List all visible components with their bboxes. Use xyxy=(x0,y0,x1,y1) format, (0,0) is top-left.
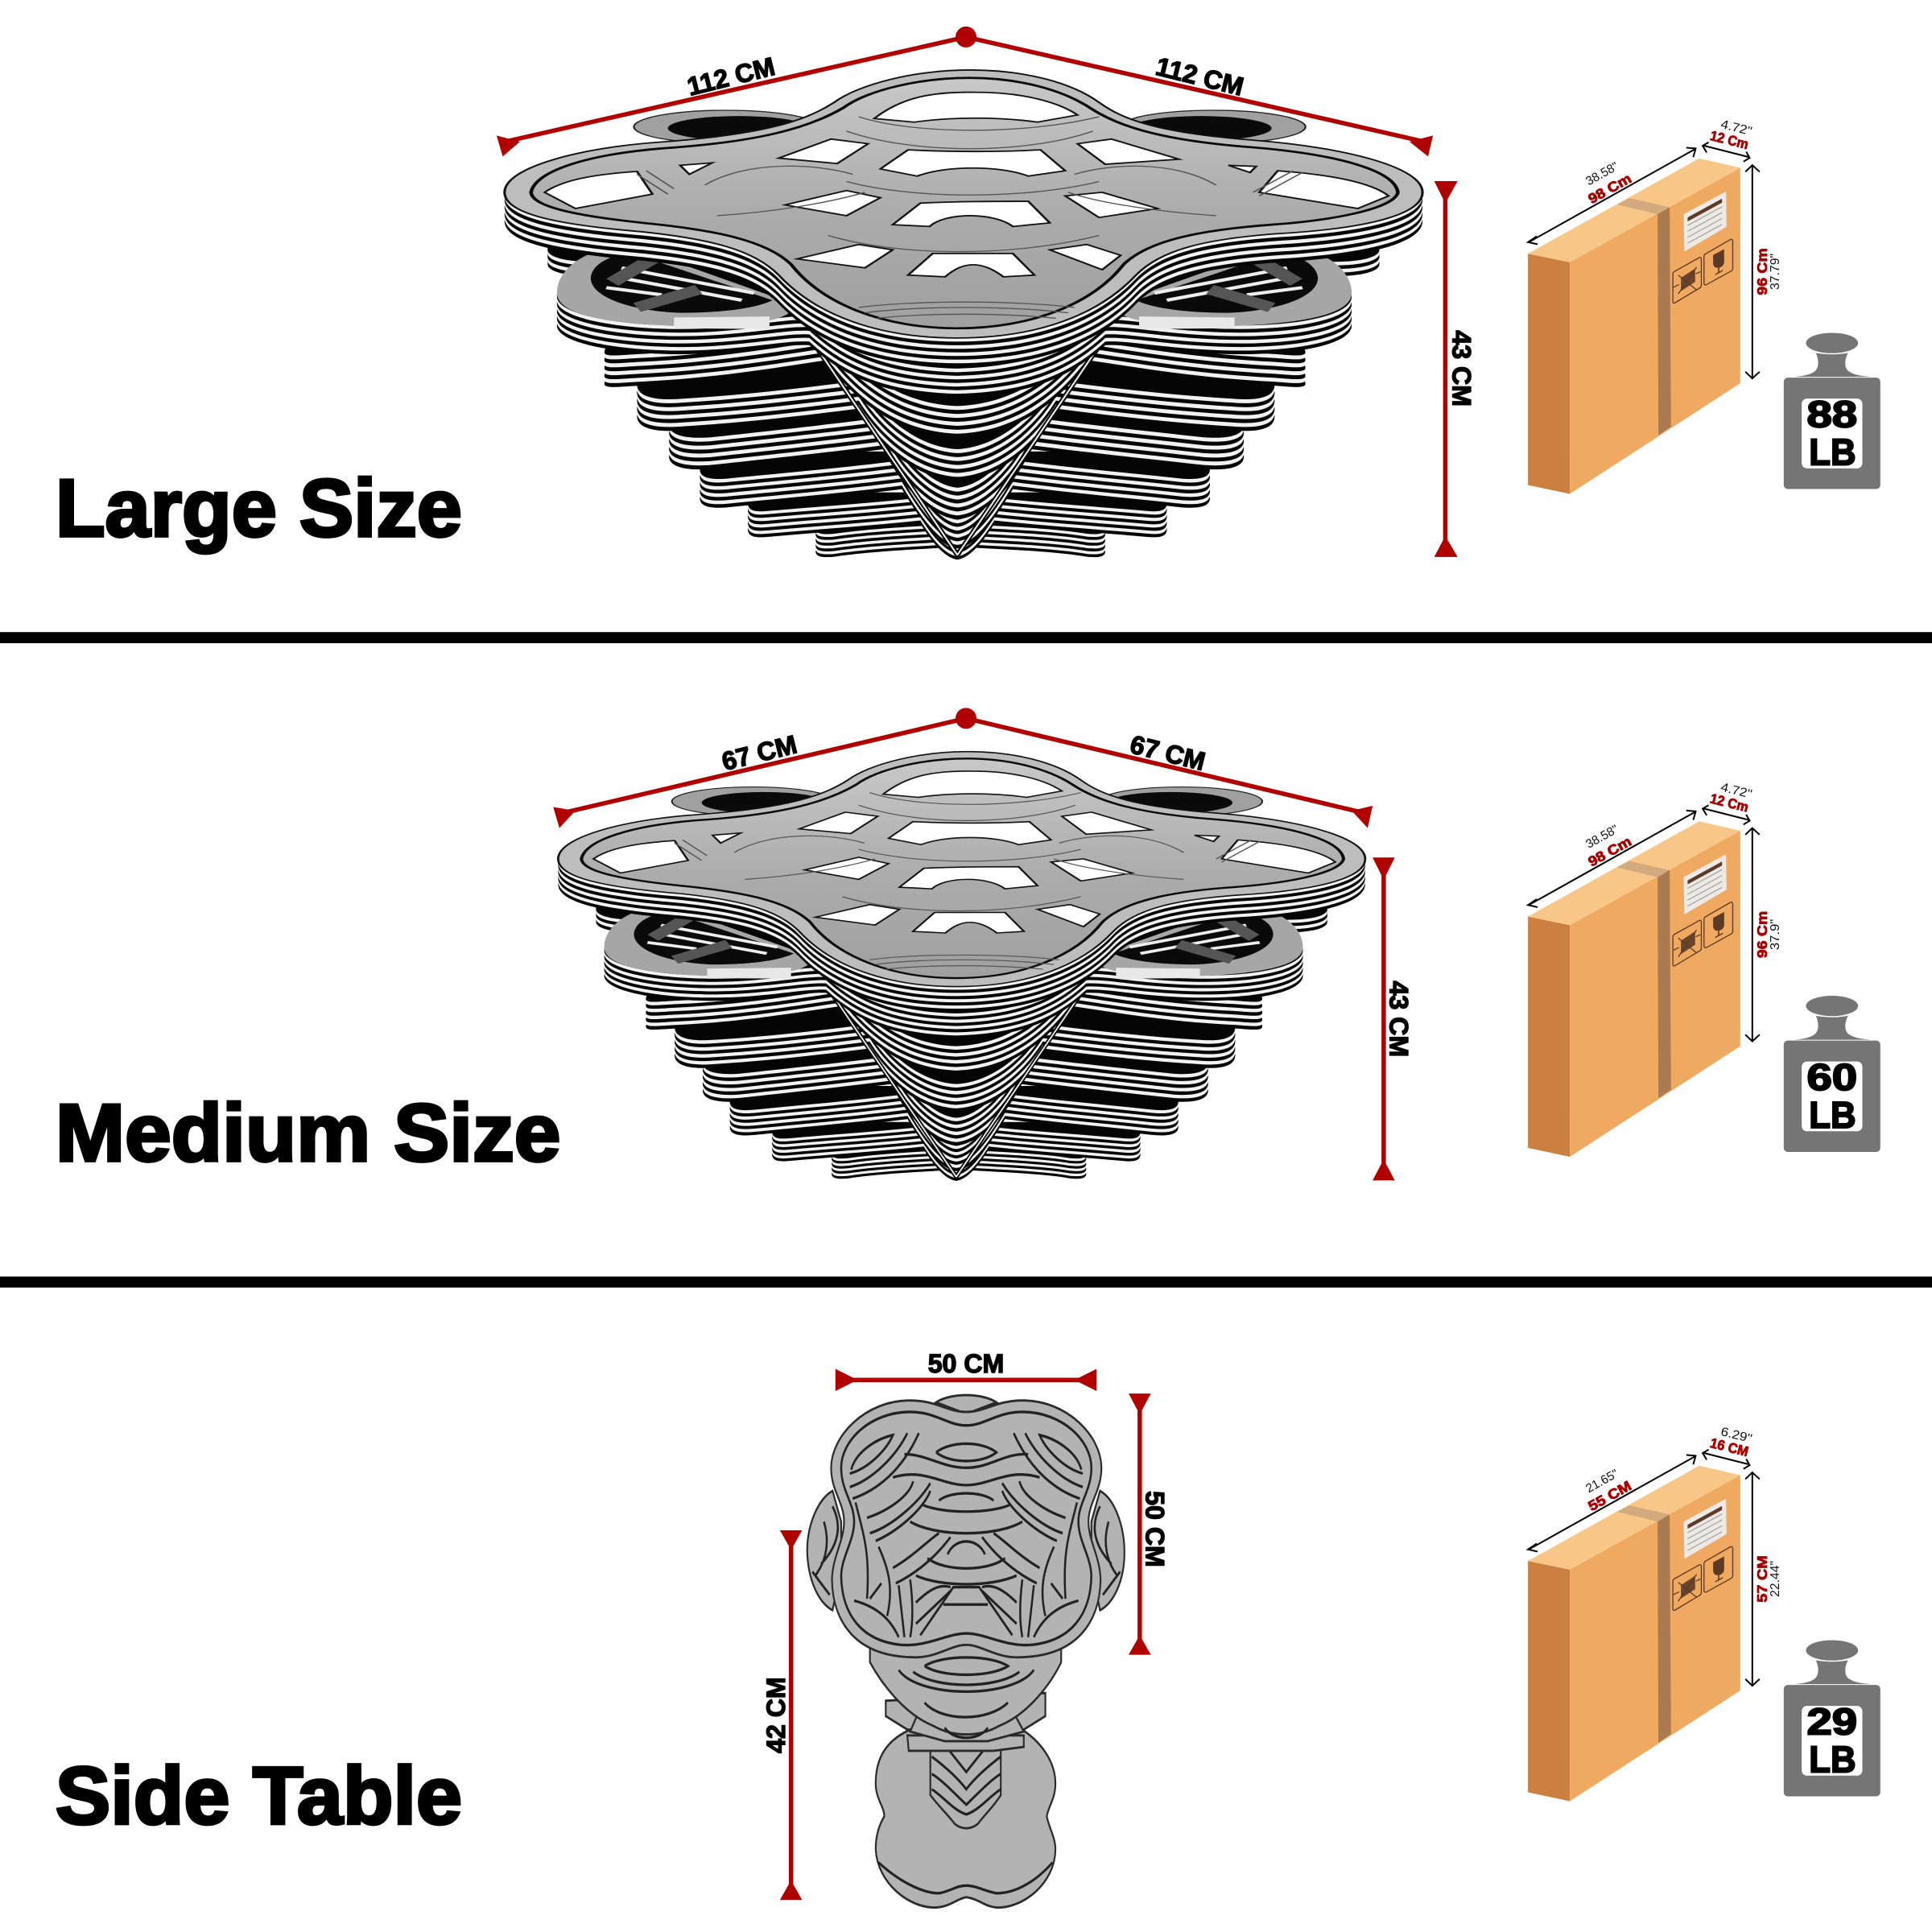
heading: Side Table: Side Table xyxy=(56,1751,462,1841)
weight badge: 60 LB: 60 xyxy=(1806,1056,1857,1098)
dimension: width and depth lines xyxy=(497,27,1433,156)
heading: Medium Size: Medium Size xyxy=(56,1088,560,1179)
shipping box: large xyxy=(1528,118,1782,493)
shipping box: side table xyxy=(1528,1425,1782,1801)
dimension: height: 43 CM xyxy=(1447,330,1476,407)
shipping box: large: 96 Cm xyxy=(1754,248,1770,295)
table illustration: side table top view xyxy=(807,1395,1125,1908)
dimension: side table height xyxy=(762,1530,802,1900)
dimension: top width xyxy=(836,1349,1096,1391)
dimension: top depth xyxy=(1129,1393,1169,1655)
shipping box: side table: 21.65" xyxy=(1583,1467,1620,1496)
dimension: height xyxy=(1435,181,1476,557)
weight badge: 29 LB: 29 xyxy=(1806,1700,1857,1742)
shipping box: medium: 98 Cm xyxy=(1585,833,1634,870)
shipping box: medium: 96 Cm xyxy=(1754,911,1770,958)
shipping box: side table: 55 CM xyxy=(1585,1477,1634,1514)
shipping box: large: 12 Cm xyxy=(1708,127,1750,152)
weight badge: 88 LB: 88 xyxy=(1806,393,1857,435)
dimension: width and depth lines: 112 CM xyxy=(1153,52,1246,101)
dimension: side table height: 42 CM xyxy=(762,1677,791,1753)
weight badge: 29 LB: LB xyxy=(1809,1738,1856,1780)
heading: Large Size: Large Size xyxy=(56,464,462,554)
shipping box: medium: 37.9" xyxy=(1769,919,1782,950)
shipping box: large: 38.58" xyxy=(1583,159,1620,188)
weight badge: 88 LB: LB xyxy=(1809,431,1856,473)
shipping box: side table: 6.29" xyxy=(1719,1425,1753,1446)
dimension: top width: 50 CM xyxy=(928,1349,1004,1378)
dimension: width and depth lines: 67 CM xyxy=(1127,729,1208,776)
weight badge: 60 LB: LB xyxy=(1809,1094,1856,1136)
panel: side table xyxy=(56,1349,1880,1908)
table illustration: medium xyxy=(558,752,1365,1181)
shipping box: large: 98 Cm xyxy=(1585,170,1634,207)
panel: medium size xyxy=(56,708,1880,1181)
dimension: width and depth lines xyxy=(553,708,1373,828)
dimension: height: 43 CM xyxy=(1385,981,1414,1057)
weight badge: 60 LB xyxy=(1784,996,1880,1152)
shipping box: large: 4.72" xyxy=(1719,118,1753,138)
dimension: height xyxy=(1373,857,1414,1180)
dimension: width and depth lines: 112 CM xyxy=(684,52,778,101)
shipping box: medium: 4.72" xyxy=(1719,781,1753,802)
table illustration: large xyxy=(505,70,1422,559)
shipping box: side table: 22.44" xyxy=(1769,1561,1782,1597)
weight badge: 29 LB xyxy=(1784,1640,1880,1796)
weight badge: 88 LB xyxy=(1784,332,1880,489)
panel: large size xyxy=(56,27,1880,559)
shipping box: large: 37.79" xyxy=(1769,254,1782,290)
shipping box: medium: 12 Cm xyxy=(1708,791,1750,815)
shipping box: medium xyxy=(1528,781,1782,1157)
shipping box: side table: 57 CM xyxy=(1754,1555,1770,1603)
dimension: top depth: 50 CM xyxy=(1140,1491,1169,1567)
shipping box: side table: 16 CM xyxy=(1708,1435,1750,1459)
dimension: width and depth lines: 67 CM xyxy=(719,729,800,776)
shipping box: medium: 38.58" xyxy=(1583,823,1620,852)
